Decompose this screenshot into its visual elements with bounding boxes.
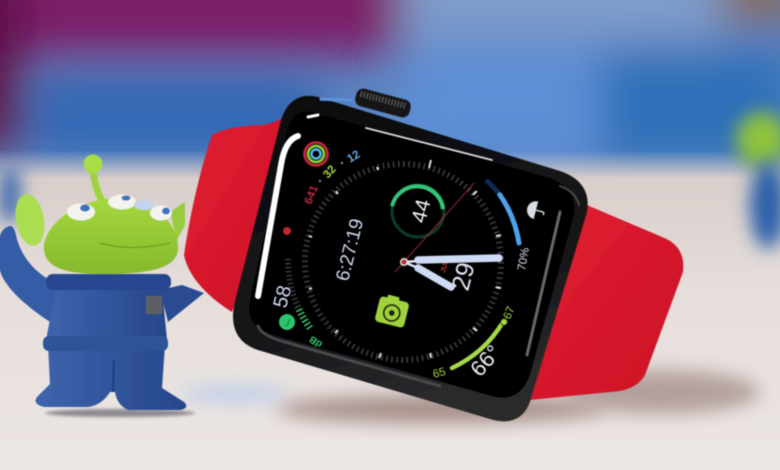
alien leg gap <box>113 360 114 392</box>
minute hand <box>404 261 418 262</box>
hour hand <box>404 262 418 268</box>
alien mouth <box>100 243 170 248</box>
activity numbers <box>303 149 362 206</box>
activity numbers: 32 <box>321 163 339 181</box>
alien left arm <box>0 226 60 322</box>
blue reflection on case <box>320 99 352 100</box>
alien legs and feet <box>36 345 186 410</box>
weather arc <box>486 180 519 243</box>
noise unit: dB <box>307 333 325 350</box>
green gauge with 44: 44 <box>408 197 436 225</box>
toy alien <box>0 154 204 410</box>
minute ticks ring <box>305 164 501 360</box>
icon: camera remote <box>374 293 410 328</box>
alien antenna <box>93 165 104 205</box>
digital crown <box>354 87 412 119</box>
watch screen <box>249 112 574 398</box>
date: JUN <box>440 258 450 273</box>
alien torso <box>46 288 167 340</box>
activity rings <box>304 142 328 166</box>
recording dot <box>283 227 291 235</box>
alien left ear <box>12 192 48 248</box>
icon: ear badge <box>279 314 295 330</box>
center pin <box>401 259 407 265</box>
noise gauge <box>288 257 310 328</box>
shadow under watch <box>45 370 760 423</box>
alien eyes <box>67 194 172 220</box>
alien waist band <box>43 336 168 351</box>
watch case <box>233 96 588 421</box>
temperature high: 67 <box>502 305 518 321</box>
watch band <box>184 102 683 400</box>
hour ticks <box>309 160 501 358</box>
watch face <box>270 142 546 381</box>
rain percentage: 70% <box>516 247 532 272</box>
alien badge <box>146 296 162 314</box>
alien right ear <box>170 202 185 240</box>
alien right arm <box>160 285 204 322</box>
green gauge with 44 <box>392 185 444 237</box>
temperature arc <box>452 319 507 368</box>
left band strap <box>184 102 312 312</box>
temperature low: 65 <box>432 366 447 381</box>
icon: umbrella <box>525 199 546 221</box>
right band strap <box>530 203 683 400</box>
hands <box>395 183 499 287</box>
glass reflections <box>258 115 579 386</box>
activity numbers: 12 <box>345 149 362 166</box>
noise reading: 58 <box>270 283 296 310</box>
alien collar <box>46 274 171 290</box>
current temperature: 66° <box>465 340 506 381</box>
activity numbers: 641 <box>303 183 321 206</box>
date: 29 <box>447 260 481 293</box>
digital time: 6:27:19 <box>332 217 368 283</box>
seconds hand <box>395 183 474 272</box>
alien head <box>44 198 178 274</box>
